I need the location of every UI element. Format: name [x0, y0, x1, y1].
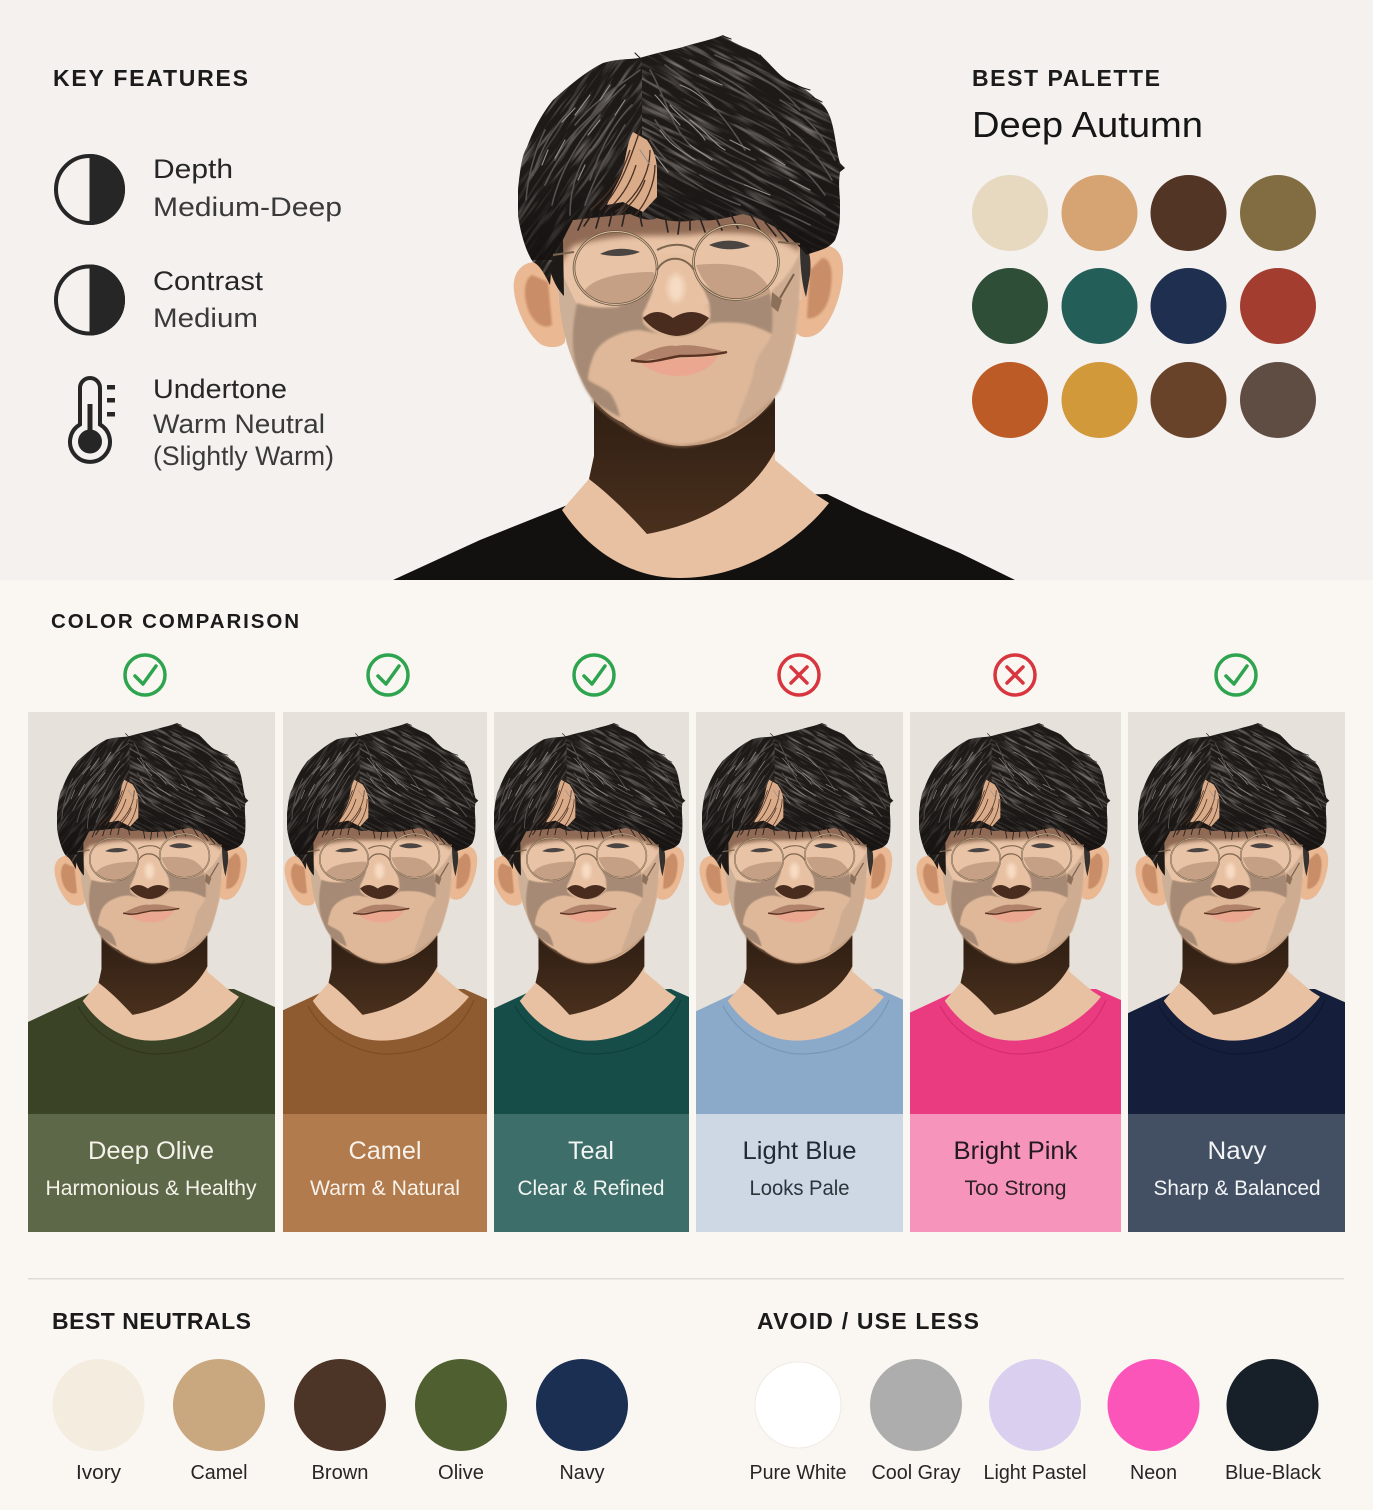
feature: undertone: Warm Neutral [153, 409, 325, 439]
feature: contrast: Contrast [153, 266, 264, 296]
panel: navy: Navy [1208, 1137, 1267, 1165]
swatch: neon: Neon [1130, 1462, 1177, 1484]
panel: teal [269, 565, 909, 1232]
swatch: brown [294, 1359, 386, 1484]
panel: deep olive: Deep Olive [88, 1137, 214, 1165]
icon: half circle depth [56, 154, 125, 225]
panel: navy: Sharp & Balanced [1154, 1177, 1320, 1200]
panel: light blue: Light Blue [742, 1137, 856, 1165]
swatch: blue-black: Blue-Black [1225, 1462, 1322, 1484]
heading: avoid: AVOID / USE LESS [757, 1308, 979, 1334]
swatch: cool gray [870, 1359, 962, 1484]
panel: best neutrals [52, 1308, 628, 1484]
swatch: cool gray: Cool Gray [872, 1462, 960, 1484]
swatch: pure white [750, 1362, 846, 1484]
icon: check teal [574, 655, 614, 695]
panel: camel: Warm & Natural [310, 1177, 460, 1200]
icon: cross light blue [779, 655, 819, 695]
swatch: ivory [52, 1359, 144, 1484]
feature: undertone: (Slightly Warm) [153, 441, 334, 471]
feature: depth: Medium-Deep [153, 192, 342, 222]
panel: camel [62, 565, 702, 1232]
heading: key features: KEY FEATURES [53, 65, 248, 91]
swatch: blue-black [1225, 1359, 1322, 1484]
swatch: light pastel [984, 1359, 1086, 1484]
feature: depth [56, 154, 342, 225]
key features panel [53, 65, 342, 471]
panel: bright pink: Bright Pink [954, 1137, 1078, 1165]
panel: light blue [477, 565, 1117, 1232]
panel: deep olive: Harmonious & Healthy [46, 1177, 257, 1200]
best palette panel [972, 65, 1316, 438]
heading: best palette: BEST PALETTE [972, 65, 1160, 91]
feature: contrast [56, 264, 264, 336]
heading: best neutrals: BEST NEUTRALS [52, 1308, 251, 1334]
heading: color comparison: COLOR COMPARISON [51, 610, 299, 633]
panel: navy [913, 565, 1373, 1232]
panel: bright pink: Too Strong [964, 1177, 1066, 1200]
feature: depth: Depth [153, 154, 233, 184]
panel: avoid / use less [750, 1308, 1322, 1484]
icon: check navy [1216, 655, 1256, 695]
background: bottom section [0, 580, 1373, 1510]
feature: undertone [70, 374, 334, 471]
panel: bright pink [694, 565, 1334, 1232]
swatch: neon [1108, 1359, 1200, 1484]
panel: deep olive [0, 565, 472, 1232]
swatch: olive [415, 1359, 507, 1484]
palette name: Deep Autumn [972, 104, 1203, 145]
icon: cross bright pink [995, 655, 1035, 695]
palette swatches [972, 175, 1316, 438]
feature: contrast: Medium [153, 303, 258, 333]
feature: undertone: Undertone [153, 374, 287, 404]
panel: camel: Camel [348, 1137, 422, 1165]
icon: thermometer [70, 378, 115, 462]
swatch: olive: Olive [438, 1462, 484, 1484]
swatch: brown: Brown [312, 1462, 368, 1484]
panel: teal: Clear & Refined [518, 1177, 664, 1200]
panel: teal: Teal [568, 1137, 614, 1165]
swatch: ivory: Ivory [76, 1462, 121, 1484]
swatch: camel [173, 1359, 265, 1484]
main portrait [232, 0, 1106, 580]
swatch: pure white: Pure White [750, 1462, 846, 1484]
swatch: navy [536, 1359, 628, 1484]
icon: check camel [368, 655, 408, 695]
swatch: light pastel: Light Pastel [984, 1462, 1086, 1484]
swatch: navy: Navy [560, 1462, 604, 1484]
icon: check deep olive [125, 655, 165, 695]
panel: light blue: Looks Pale [750, 1177, 850, 1200]
swatch: camel: Camel [190, 1462, 248, 1484]
background: top section [0, 0, 1373, 580]
icon: half circle contrast [56, 264, 125, 336]
